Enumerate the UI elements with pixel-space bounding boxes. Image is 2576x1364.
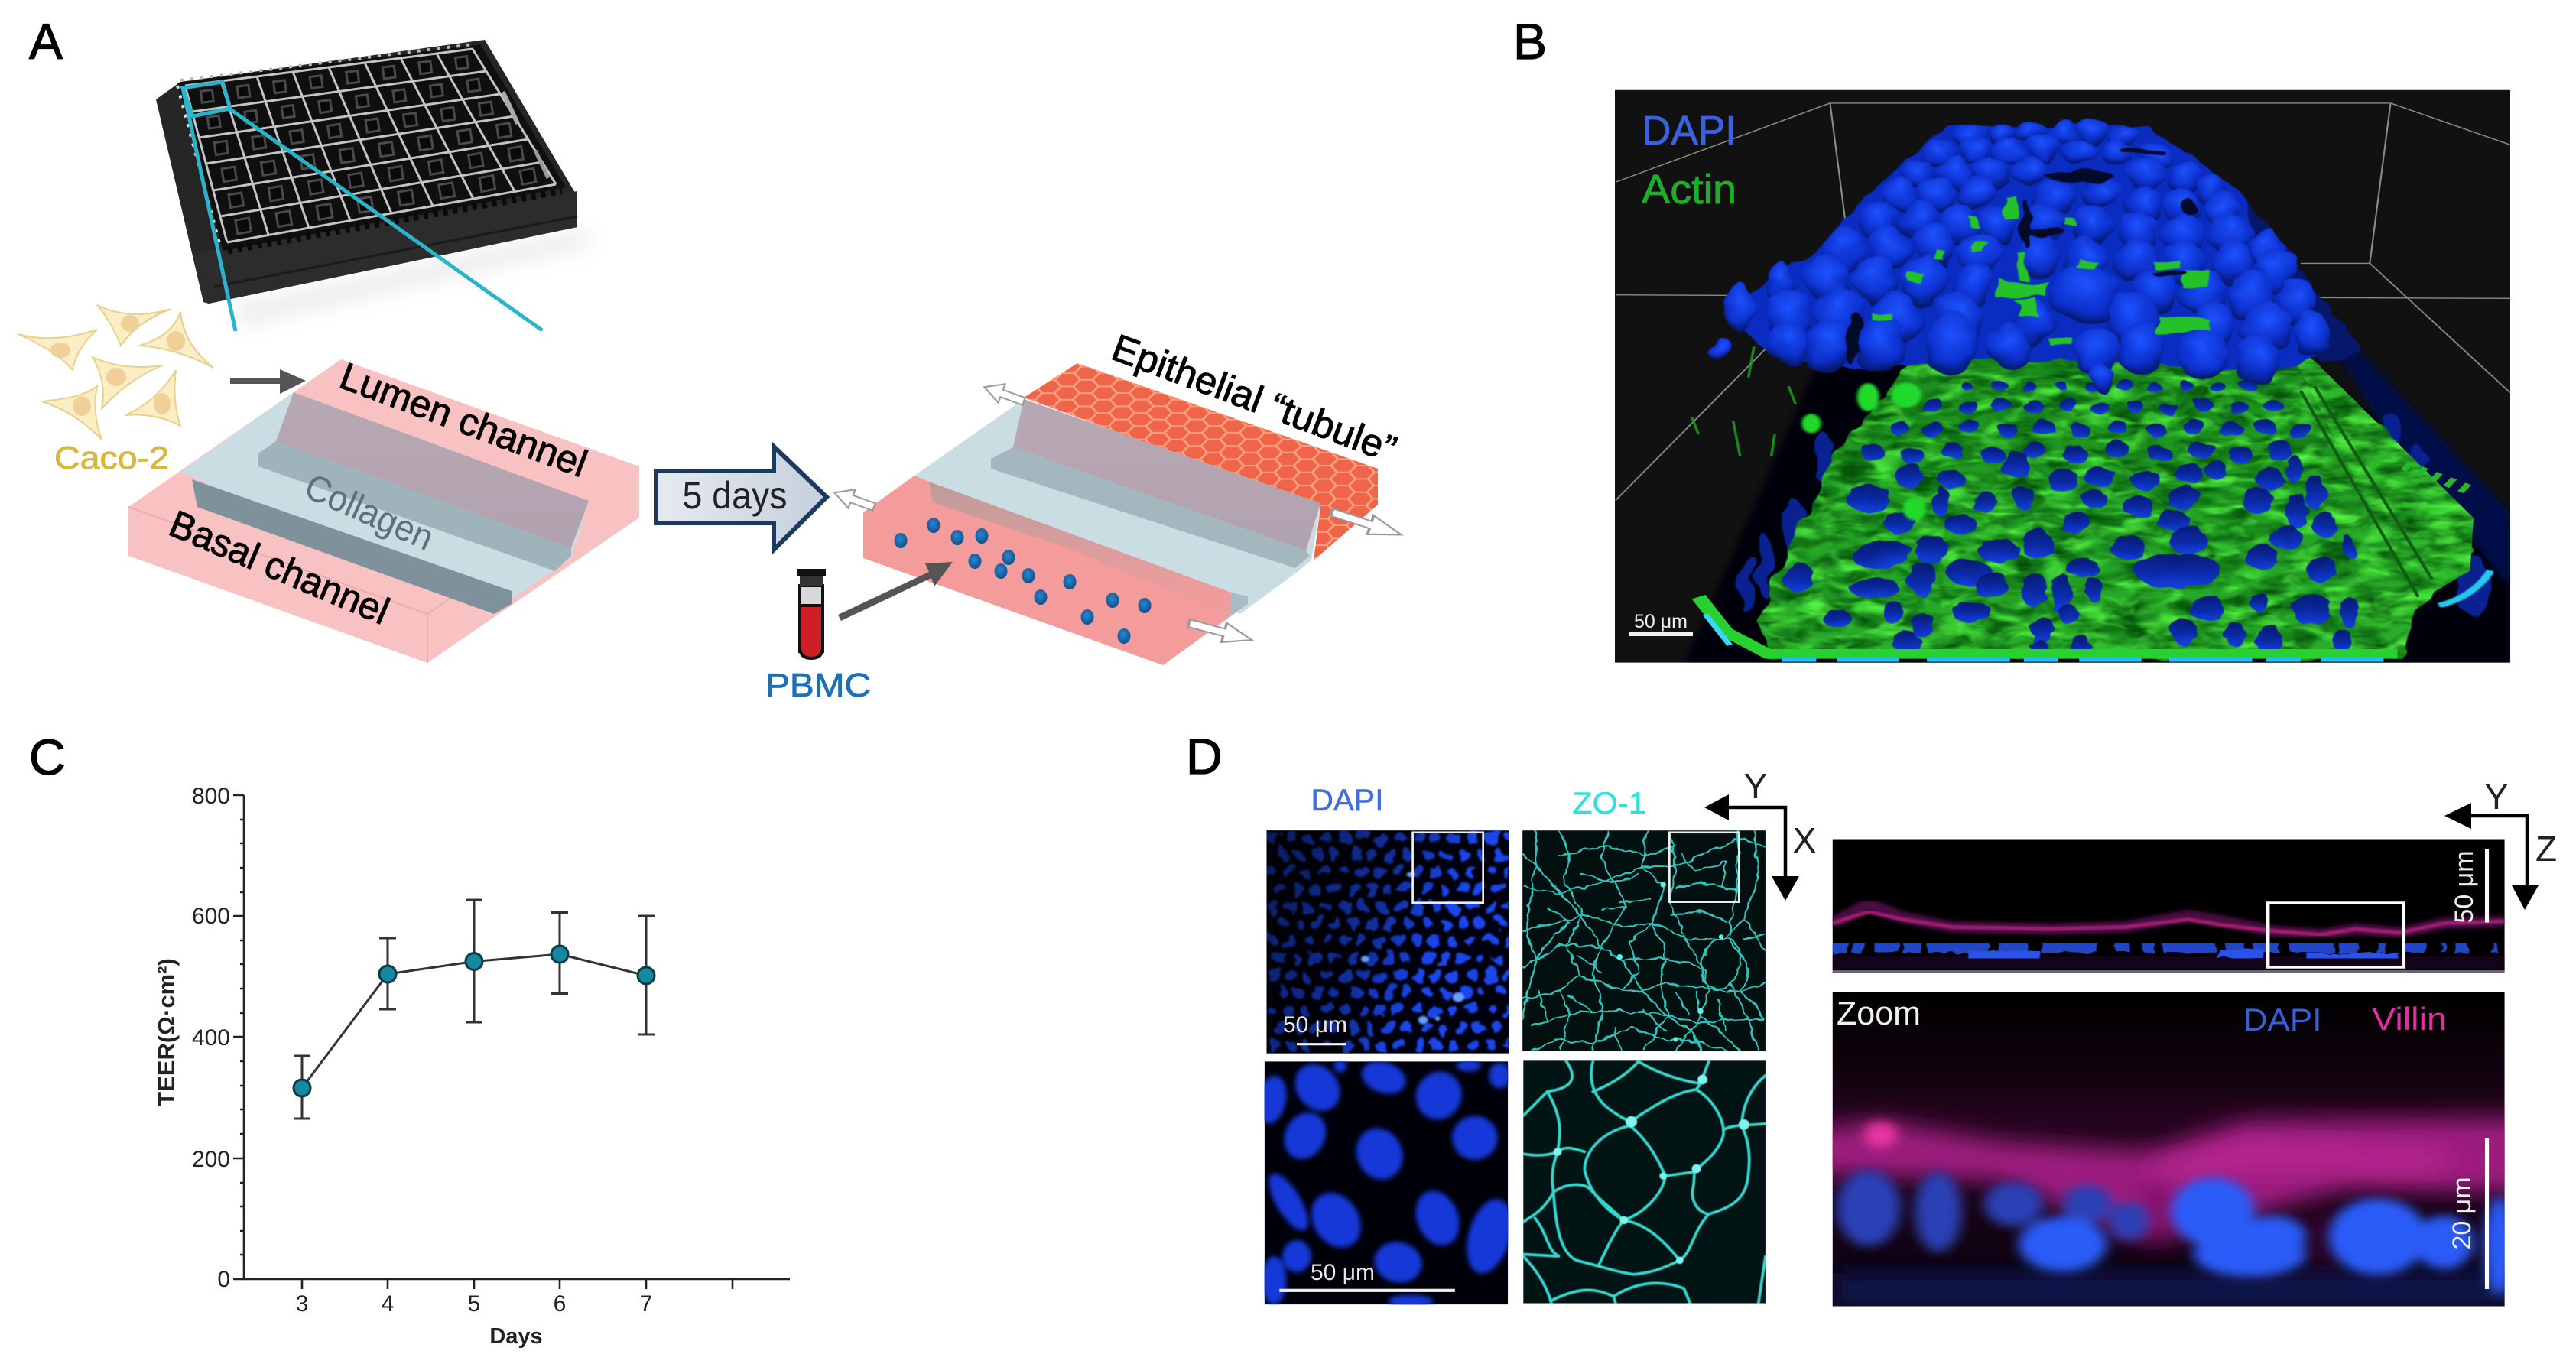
data line [302, 954, 646, 1088]
axis title: TEER: TEER(Ω·cm²) [153, 958, 180, 1106]
panel C: TEER chart [29, 729, 790, 1349]
label: Basal channel: Basal channel [164, 502, 395, 633]
axes: Y and Z: Y [2485, 777, 2508, 817]
heading: ZO-1: ZO-1 [1572, 787, 1647, 820]
dark gaps on dome [1848, 149, 2198, 364]
micrograph: ZO-1 zoom [1523, 1060, 1766, 1304]
text: scale labels, DAPI images [1283, 1012, 1375, 1285]
epithelial tubule surface [1024, 363, 1378, 560]
micrograph: DAPI overview [1266, 830, 1509, 1054]
zoom guide lines from well to chip [183, 82, 542, 331]
panel label A: A [29, 13, 63, 70]
panel A: organ-on-chip setup [18, 13, 1404, 704]
label: Lumen channel: Lumen channel [334, 354, 593, 486]
panel label B: B [1513, 13, 1547, 70]
label: PBMC: PBMC [765, 667, 871, 704]
scale bar 50 µm: 50 μm [1634, 611, 1688, 632]
panel label C: C [29, 729, 66, 785]
arrow: 5 days [656, 447, 827, 550]
text: XZ image labels: 20 μm [2448, 1177, 2477, 1250]
axes: X and Y [1704, 766, 1816, 901]
legend: DAPI: DAPI [1642, 108, 1736, 154]
axes [233, 795, 790, 1289]
line chart [153, 784, 790, 1349]
label: Epithelial tubule: Epithelial “tubule” [1106, 326, 1402, 471]
icon: flow arrows [831, 378, 1404, 650]
text: XZ image labels: DAPI [2243, 1002, 2321, 1038]
panel D: fluorescence micrographs [1186, 728, 2557, 1307]
axes: X and Y: X [1793, 820, 1816, 860]
panel label D: D [1186, 728, 1223, 784]
axes: Y and Z: Z [2535, 829, 2557, 869]
axis tick labels: 400 [192, 1025, 230, 1051]
axis tick labels: 4 [382, 1291, 394, 1317]
label: Caco-2: Caco-2 [54, 440, 169, 476]
data points [294, 946, 655, 1096]
axis tick labels [192, 784, 652, 1317]
heading: DAPI: DAPI [1311, 784, 1384, 817]
dark walls of the tubule [1684, 351, 2510, 663]
text: XZ image labels: Villin [2372, 1001, 2447, 1037]
panel B: 3D confocal reconstruction [1513, 13, 2510, 663]
axis tick labels: 600 [192, 904, 230, 929]
axis tick labels: 5 [468, 1291, 480, 1317]
text: XZ image labels: Zoom [1837, 995, 1921, 1032]
DAPI nuclei on actin layer [1784, 379, 2359, 656]
axis tick labels: 7 [640, 1291, 652, 1317]
left chip diagram [128, 359, 639, 663]
text: scale labels, DAPI images: 50 μm [1283, 1012, 1347, 1038]
legend: Actin: Actin [1642, 167, 1736, 213]
actin patches on dome [1872, 197, 2211, 346]
text: XZ image labels: 50 μm [2450, 850, 2479, 924]
actin layer [1761, 351, 2474, 658]
axes: X and Y: Y [1744, 766, 1767, 806]
text: scale labels, DAPI images: 50 μm [1311, 1260, 1375, 1285]
axes: Y and Z [2444, 777, 2557, 910]
micrograph: DAPI zoom [1254, 1056, 1519, 1307]
axis tick labels: 6 [554, 1291, 566, 1317]
right chip diagram with epithelial tubule [863, 363, 1378, 665]
bright green inclusions [1801, 383, 1925, 521]
axis tick labels: 3 [296, 1291, 308, 1317]
DAPI dome [1710, 120, 2363, 395]
bright rim [1699, 597, 2398, 654]
axis tick labels: 0 [217, 1267, 230, 1292]
axis tick labels: 800 [192, 784, 230, 809]
PBMC dots in basal channel [895, 518, 1152, 644]
microscopy image [1615, 90, 2510, 663]
axis tick labels: 200 [192, 1147, 230, 1172]
micrograph: XZ section zoom [1804, 992, 2532, 1307]
micrograph: ZO-1 overview [1522, 830, 1766, 1051]
arrow: cells into lumen channel [230, 369, 306, 394]
text: XZ image labels [1837, 850, 2479, 1250]
label: Collagen: Collagen [299, 466, 440, 559]
icon: Caco-2 cells [18, 305, 213, 440]
axis title: Days: Days [489, 1324, 543, 1349]
error bars [294, 900, 655, 1119]
arrow: PBMC into basal channel [838, 562, 953, 621]
microplate [156, 40, 596, 325]
icon: blood tube [797, 569, 826, 658]
arrow: 5 days: 5 days [682, 474, 788, 517]
micrograph: XZ section overview [1833, 840, 2505, 973]
